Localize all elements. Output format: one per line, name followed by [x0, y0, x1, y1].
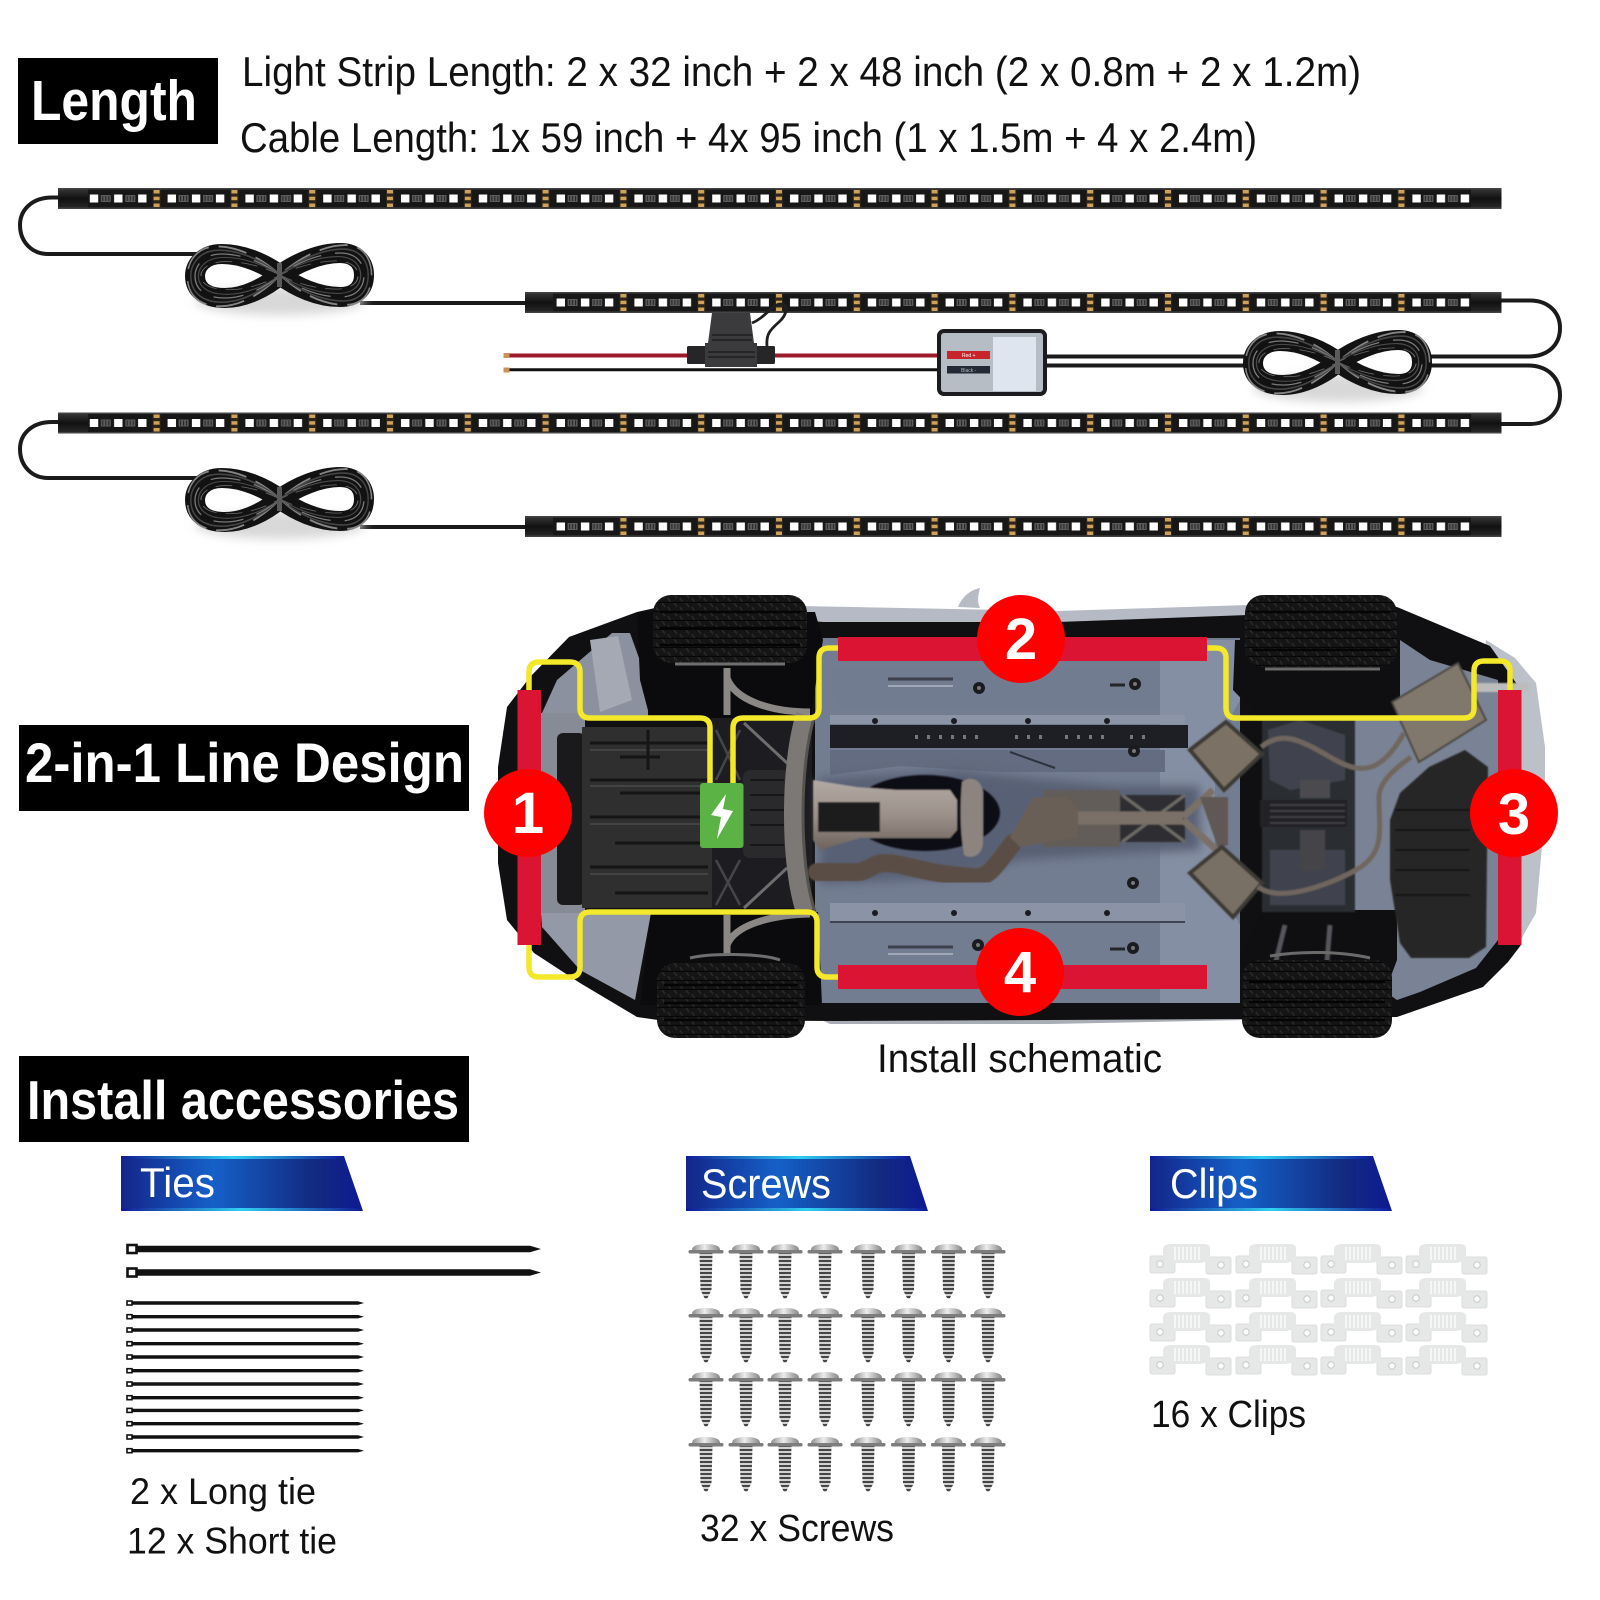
tab: Screws: [686, 1156, 928, 1211]
tires: [653, 595, 1397, 1038]
power wires and fuse holder: [504, 304, 940, 372]
controller box: [939, 331, 1045, 394]
clips grid: [1150, 1244, 1487, 1375]
red strip position 1: [484, 690, 572, 945]
long cable ties: [128, 1245, 541, 1276]
heading: Length: [18, 58, 218, 144]
tab: Clips: Clips: [1170, 1160, 1258, 1207]
heading: 2-in-1 Line Design: [19, 725, 469, 811]
heading: install accessories: Install accessories: [27, 1069, 459, 1131]
short cable ties: [127, 1301, 364, 1453]
rear wheel wells: [1233, 640, 1400, 720]
label: screws quantity: 32 x Screws: [700, 1508, 894, 1550]
mirror: [958, 588, 980, 608]
light strip 4: [525, 516, 1502, 537]
text: light strip length: Light Strip Length: 2 x 32 inch + 2 x 48 inch (2 x 0.8m + 2 x 1.2m): [242, 48, 1361, 95]
front suspension and subframe: [712, 668, 815, 955]
cable: lower left loop and coil: [20, 422, 527, 539]
controller box: Red +: [962, 353, 976, 359]
car underbody illustration: [498, 588, 1545, 1038]
light strip 2: [525, 292, 1502, 313]
red strip position 4: 4: [1004, 940, 1036, 1005]
engine and exhaust: [813, 775, 1228, 877]
cable: top left loop and coil: [20, 198, 527, 315]
lighter rear floor section: [1160, 640, 1240, 1003]
tab: Ties: [121, 1156, 363, 1211]
silver rear rim: [1480, 640, 1545, 975]
light strip 3: [58, 412, 1502, 434]
red strip position 2: 2: [1005, 607, 1037, 672]
black body shell: [498, 607, 1521, 1021]
rear mechanics: [1190, 663, 1529, 985]
label: ties quantity: 12 x Short tie: [127, 1520, 337, 1562]
screws grid: [688, 1244, 1006, 1492]
caption: install schematic: Install schematic: [877, 1037, 1162, 1081]
red strip position 3: 3: [1498, 782, 1530, 847]
red strip position 3: [1470, 690, 1558, 945]
front silver panels: [542, 633, 648, 718]
text: cable length: Cable Length: 1x 59 inch + 4x 95 inch (1 x 1.5m + 4 x 2.4m): [240, 114, 1257, 161]
yellow wiring routes: [529, 648, 1510, 977]
red strip position 1: 1: [512, 781, 544, 846]
cable: right side loops and coil: [1045, 300, 1560, 424]
heading: 2-in-1 Line Design: 2-in-1 Line Design: [25, 731, 464, 794]
tab: Ties: Ties: [140, 1159, 215, 1206]
tab: Screws: Screws: [701, 1160, 831, 1207]
front wheel wells: [637, 612, 823, 718]
label: ties quantity: [127, 1471, 337, 1562]
red strip position 2: [838, 595, 1207, 683]
heading: Length: Length: [31, 69, 197, 133]
light strip 1: [58, 188, 1502, 209]
red strip position 4: [838, 928, 1207, 1016]
label: clips quantity: 16 x Clips: [1151, 1394, 1306, 1436]
controller box: Black -: [961, 368, 977, 374]
central floor panel: [815, 638, 1240, 1003]
icon: green power bolt: [700, 783, 744, 848]
heading: install accessories: [19, 1056, 469, 1142]
front black shield: [582, 727, 712, 908]
label: ties quantity: 2 x Long tie: [130, 1471, 316, 1512]
tab: Clips: [1150, 1156, 1392, 1211]
silver rear interior panel: [1340, 640, 1498, 1000]
floor details: rails, dents and bolts: [818, 666, 1200, 954]
silver top and bottom body edges: [800, 605, 1248, 630]
